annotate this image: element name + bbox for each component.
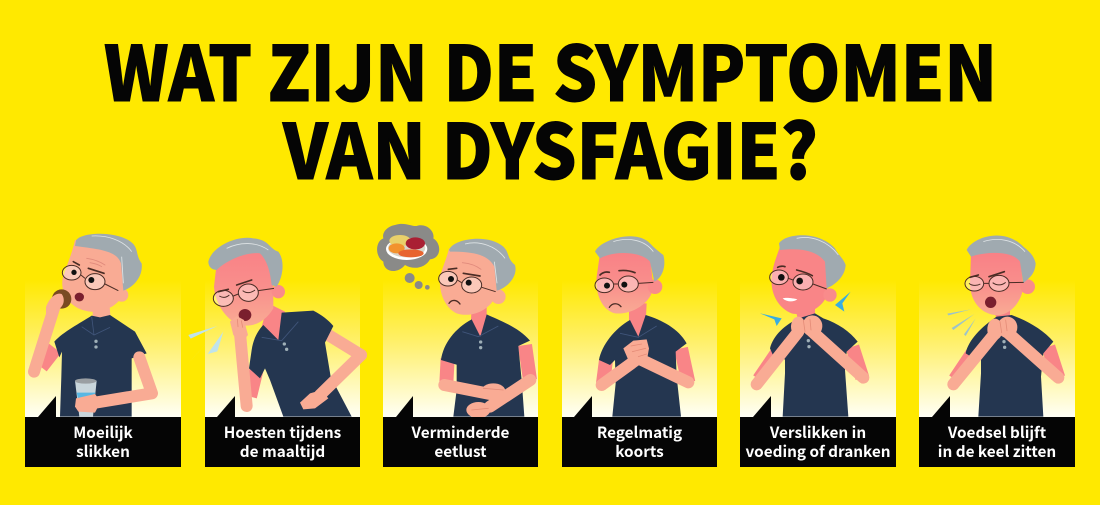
pain sparks: [760, 292, 851, 326]
panel: verslikken in voeding of dranken: [740, 235, 896, 467]
figure: man thinking of food: [377, 224, 530, 418]
title: [104, 13, 997, 201]
figure: man eating a biscuit with a glass: [34, 234, 152, 417]
label bar: [205, 417, 360, 467]
callout pointer: [38, 396, 56, 417]
title: VAN DYSFAGIE?: [282, 91, 818, 201]
label text: [938, 421, 1056, 462]
callout pointer: [217, 396, 235, 417]
label bar: [740, 417, 896, 467]
label text: Voedsel blijft: [947, 421, 1047, 443]
label bar: [25, 417, 181, 467]
label text: [411, 421, 510, 462]
label text: koorts: [615, 440, 664, 462]
label text: [73, 421, 134, 462]
label text: eetlust: [434, 440, 487, 462]
thought bubble with food: [377, 224, 439, 290]
breath lines: [947, 309, 976, 336]
label text: in de keel zitten: [938, 440, 1056, 462]
panel: hoesten tijdens de maaltijd: [186, 238, 361, 467]
label text: Regelmatig: [597, 421, 682, 443]
figure: man coughing: [186, 238, 361, 417]
label bar: [383, 417, 538, 467]
label text: [745, 421, 891, 462]
callout pointer: [396, 396, 413, 417]
cough breath: [186, 326, 223, 366]
figure: man with fever: [595, 236, 688, 417]
panel: voedsel blijft in de keel zitten: [919, 235, 1075, 467]
label text: de maaltijd: [240, 440, 325, 462]
panel: regelmatig koorts: [562, 236, 717, 467]
callout pointer: [932, 396, 950, 417]
label text: Hoesten tijdens: [224, 421, 342, 443]
label bar: [562, 417, 717, 467]
label text: Verslikken in: [769, 421, 866, 443]
label text: [597, 421, 682, 462]
figure: man with food stuck in throat: [947, 235, 1058, 417]
label text: [224, 421, 342, 462]
label text: slikken: [76, 440, 130, 462]
panel: verminderde eetlust: [377, 224, 538, 467]
callout pointer: [753, 396, 771, 417]
callout pointer: [574, 396, 592, 417]
title: WAT ZIJN DE SYMPTOMEN: [104, 13, 997, 123]
label text: Moeilijk: [73, 421, 134, 443]
label bar: [919, 417, 1075, 467]
label text: Verminderde: [411, 421, 510, 443]
label text: voeding of dranken: [745, 440, 891, 462]
panel: moeilijk slikken: [25, 234, 181, 467]
figure: man choking: [757, 235, 863, 417]
